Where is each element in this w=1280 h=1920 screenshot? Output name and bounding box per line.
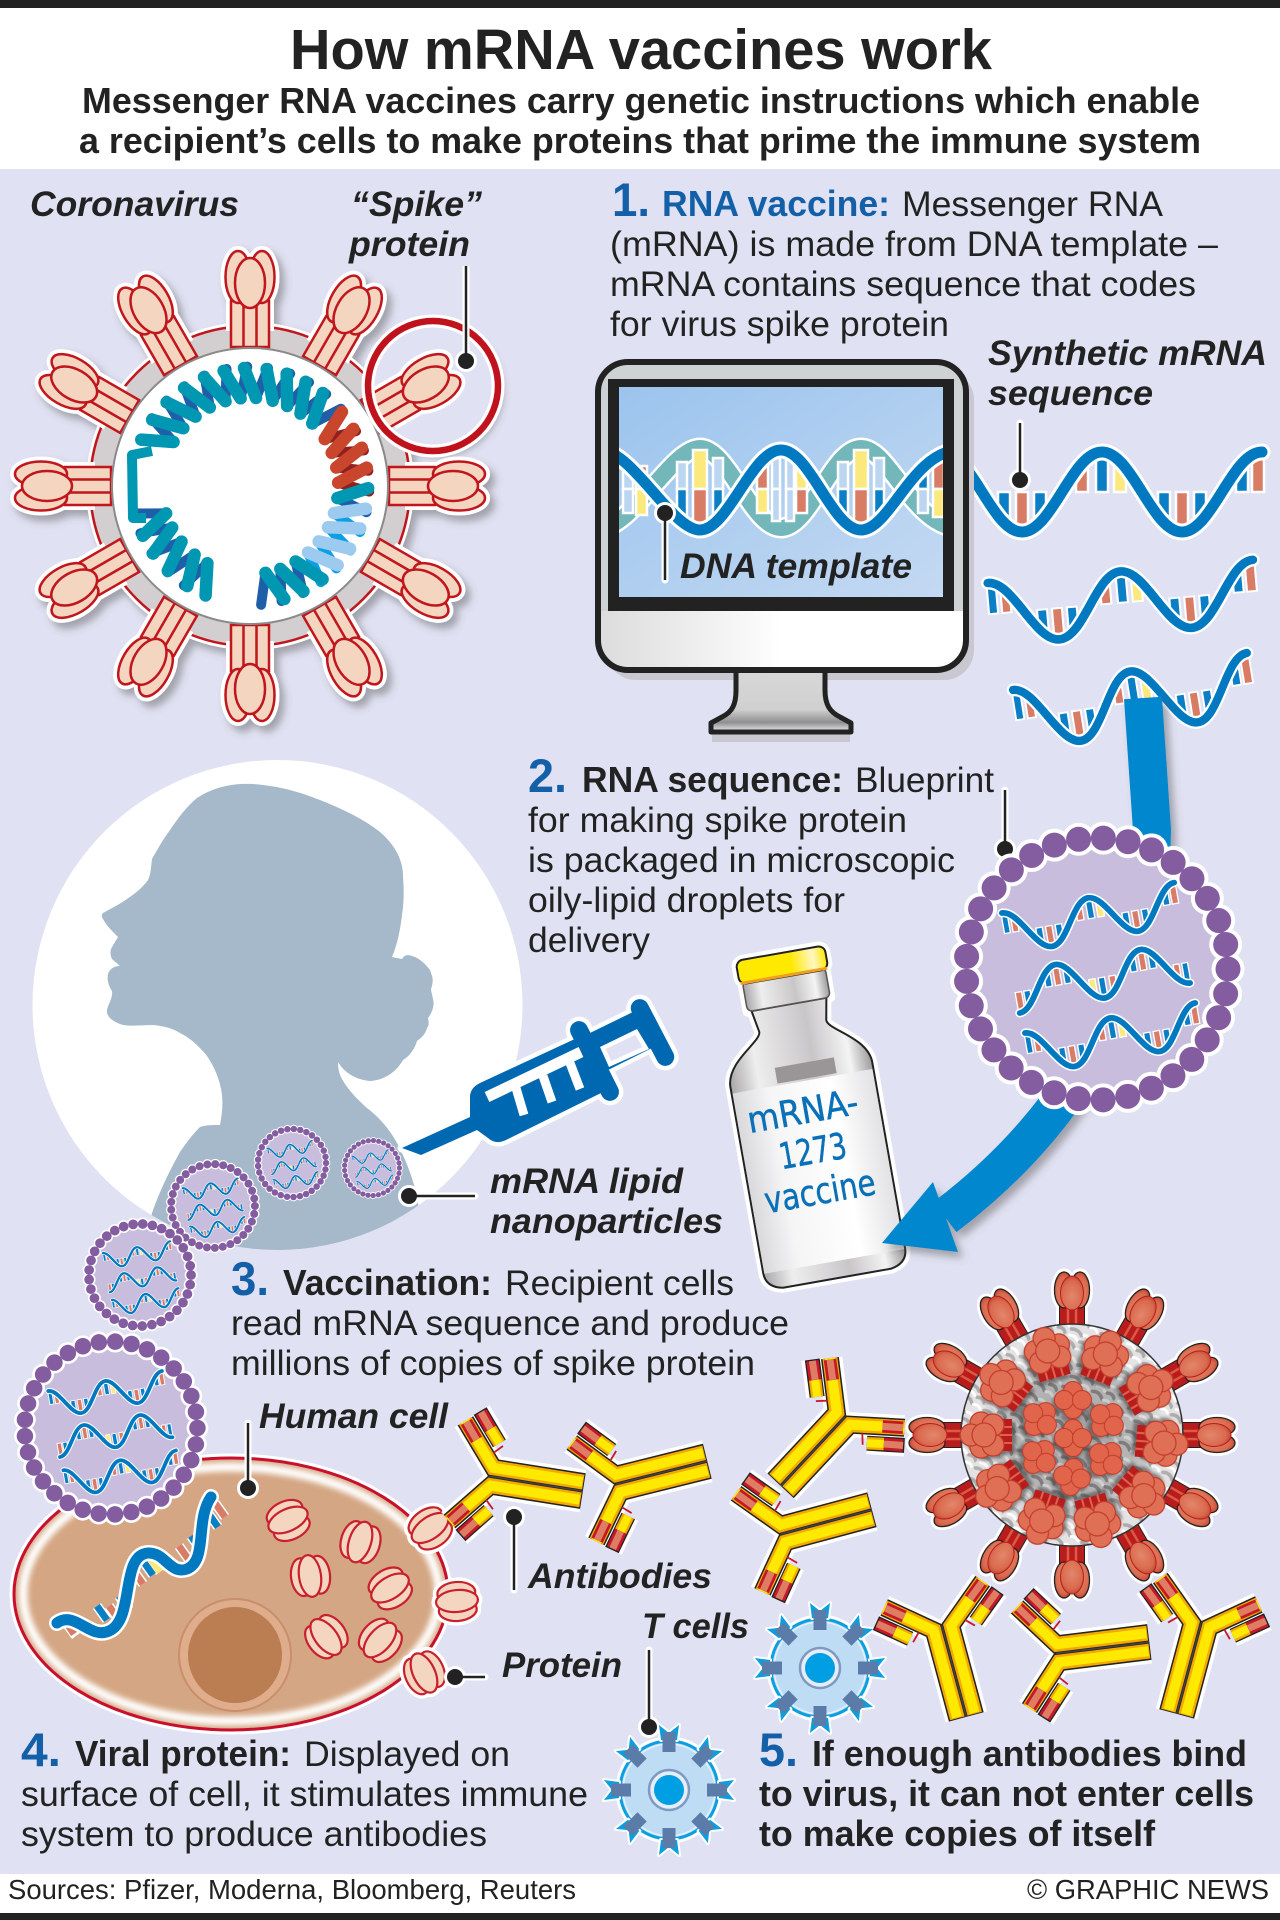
syringe plunger window and ticks (487, 1052, 581, 1115)
human cell (14, 1458, 480, 1730)
vial label text: vaccine (761, 1162, 879, 1222)
callout: protein (444, 1666, 485, 1688)
step 2 text: oily-lipid droplets for (528, 881, 845, 920)
step 5 text: 5. (759, 1723, 798, 1776)
step 3 text: read mRNA sequence and produce (231, 1304, 789, 1343)
step 1 text: for virus spike protein (610, 305, 949, 344)
step 2 text: is packaged in microscopic (528, 841, 955, 880)
label: Human cell: Human cell (259, 1396, 449, 1436)
vial label text (744, 1082, 879, 1223)
footer (0, 1874, 1280, 1920)
neutralised virus (909, 1272, 1235, 1598)
step 5 text: to virus, it can not enter cells (759, 1774, 1254, 1814)
label: Synthetic mRNA sequence (988, 333, 1267, 413)
callout: human cell (237, 1423, 259, 1499)
label: Synthetic mRNA sequence: Synthetic mRNA (988, 333, 1267, 373)
syringe (402, 996, 677, 1155)
callout: DNA template (654, 502, 676, 580)
synthetic mRNA strand 2 (986, 560, 1260, 645)
monitor (598, 362, 974, 742)
step 1 text: RNA vaccine: (662, 184, 890, 224)
label: Synthetic mRNA sequence: sequence (988, 373, 1153, 413)
title: How mRNA vaccines work (290, 18, 993, 81)
step 2 text: for making spike protein (528, 801, 907, 840)
label: Protein: Protein (502, 1645, 622, 1685)
synthetic mRNA strand 1 (940, 452, 1264, 532)
step 4 text (21, 1723, 588, 1854)
step 2 text: 2. (528, 749, 567, 802)
label: mRNA lipid nanoparticles: mRNA lipid (490, 1161, 684, 1201)
label: T cells: T cells (642, 1606, 749, 1646)
step 5 text: to make copies of itself (759, 1814, 1155, 1854)
nanoparticle on cell (25, 1342, 197, 1514)
label: Antibodies: Antibodies (527, 1556, 712, 1596)
vaccine vial (709, 941, 908, 1291)
callout: spike protein (455, 266, 477, 372)
step 1 text: mRNA contains sequence that codes (610, 265, 1196, 304)
step 1 text (610, 173, 1219, 344)
credit: © GRAPHIC NEWS (1027, 1874, 1269, 1905)
callout: lipid droplet (994, 790, 1016, 860)
step 5 text (759, 1723, 1254, 1854)
step 4 text: 4. (21, 1723, 61, 1776)
nanoparticles in shoulder (89, 1129, 400, 1326)
step 1 text: 1. (612, 173, 650, 226)
label: Spike protein: “Spike” (351, 184, 482, 224)
step 4 text: Displayed on (304, 1735, 510, 1774)
step 2 text: RNA sequence: (582, 760, 843, 800)
step 1 text: (mRNA) is made from DNA template – (610, 225, 1219, 264)
vial cap (736, 945, 828, 985)
nucleus (179, 1599, 291, 1711)
sources: Sources: Pfizer, Moderna, Bloomberg, Reuters (8, 1874, 576, 1905)
step 4 text: surface of cell, it stimulates immune (21, 1775, 588, 1814)
label: mRNA lipid nanoparticles (490, 1161, 723, 1241)
step 1 text: Messenger RNA (902, 185, 1164, 224)
step 3 text: millions of copies of spike protein (231, 1344, 755, 1383)
step 2 text: delivery (528, 921, 650, 960)
antibodies near cell (448, 1400, 723, 1553)
T cell lower (604, 1725, 734, 1855)
callout: nanoparticles (398, 1185, 475, 1207)
virus central spike clusters (1013, 1382, 1133, 1498)
step 2 text (528, 749, 994, 960)
synthetic mRNA strand 3 (1012, 653, 1258, 750)
vial label text: 1273 (776, 1126, 850, 1178)
cell mRNA strand (57, 1497, 225, 1636)
T cell upper (755, 1603, 885, 1733)
virus surface rosettes (960, 1322, 1190, 1553)
vial label text: mRNA- (744, 1082, 862, 1142)
step 4 text: system to produce antibodies (21, 1815, 487, 1854)
coronavirus diagram (15, 251, 498, 721)
callout: antibodies (503, 1506, 525, 1590)
step 3 text (231, 1252, 789, 1383)
patient silhouette (32, 760, 522, 1300)
step 3 text: Recipient cells (505, 1264, 734, 1303)
label: Spike protein (348, 184, 482, 264)
subtitle: Messenger RNA vaccines carry genetic instructions which enable (82, 81, 1200, 121)
DNA template helix (600, 448, 960, 530)
callout: synthetic mRNA (1009, 423, 1031, 491)
antibodies around virus (733, 1350, 1270, 1733)
label: DNA template: DNA template (680, 546, 912, 586)
step 2 text: Blueprint (855, 761, 994, 800)
callout: T cells (638, 1650, 660, 1738)
proteins inside cell (261, 1494, 418, 1669)
label: mRNA lipid nanoparticles: nanoparticles (490, 1201, 723, 1241)
screen (619, 387, 943, 597)
label: Coronavirus: Coronavirus (30, 184, 239, 224)
header band (0, 0, 1280, 169)
spike highlight ring (368, 321, 498, 451)
step 3 text: Vaccination: (283, 1263, 492, 1303)
subtitle (79, 81, 1201, 161)
delivery arrow (882, 698, 1152, 1252)
large lipid nanoparticle (966, 838, 1228, 1100)
viral RNA coil (132, 367, 369, 605)
monitor stand (711, 668, 851, 732)
proteins on cell surface (398, 1500, 480, 1700)
label: Spike protein: protein (348, 224, 470, 264)
step 5 text: If enough antibodies bind (812, 1734, 1247, 1774)
subtitle: a recipient’s cells to make proteins that prime the immune system (79, 121, 1201, 161)
step 4 text: Viral protein: (75, 1734, 291, 1774)
step 3 text: 3. (231, 1252, 269, 1305)
